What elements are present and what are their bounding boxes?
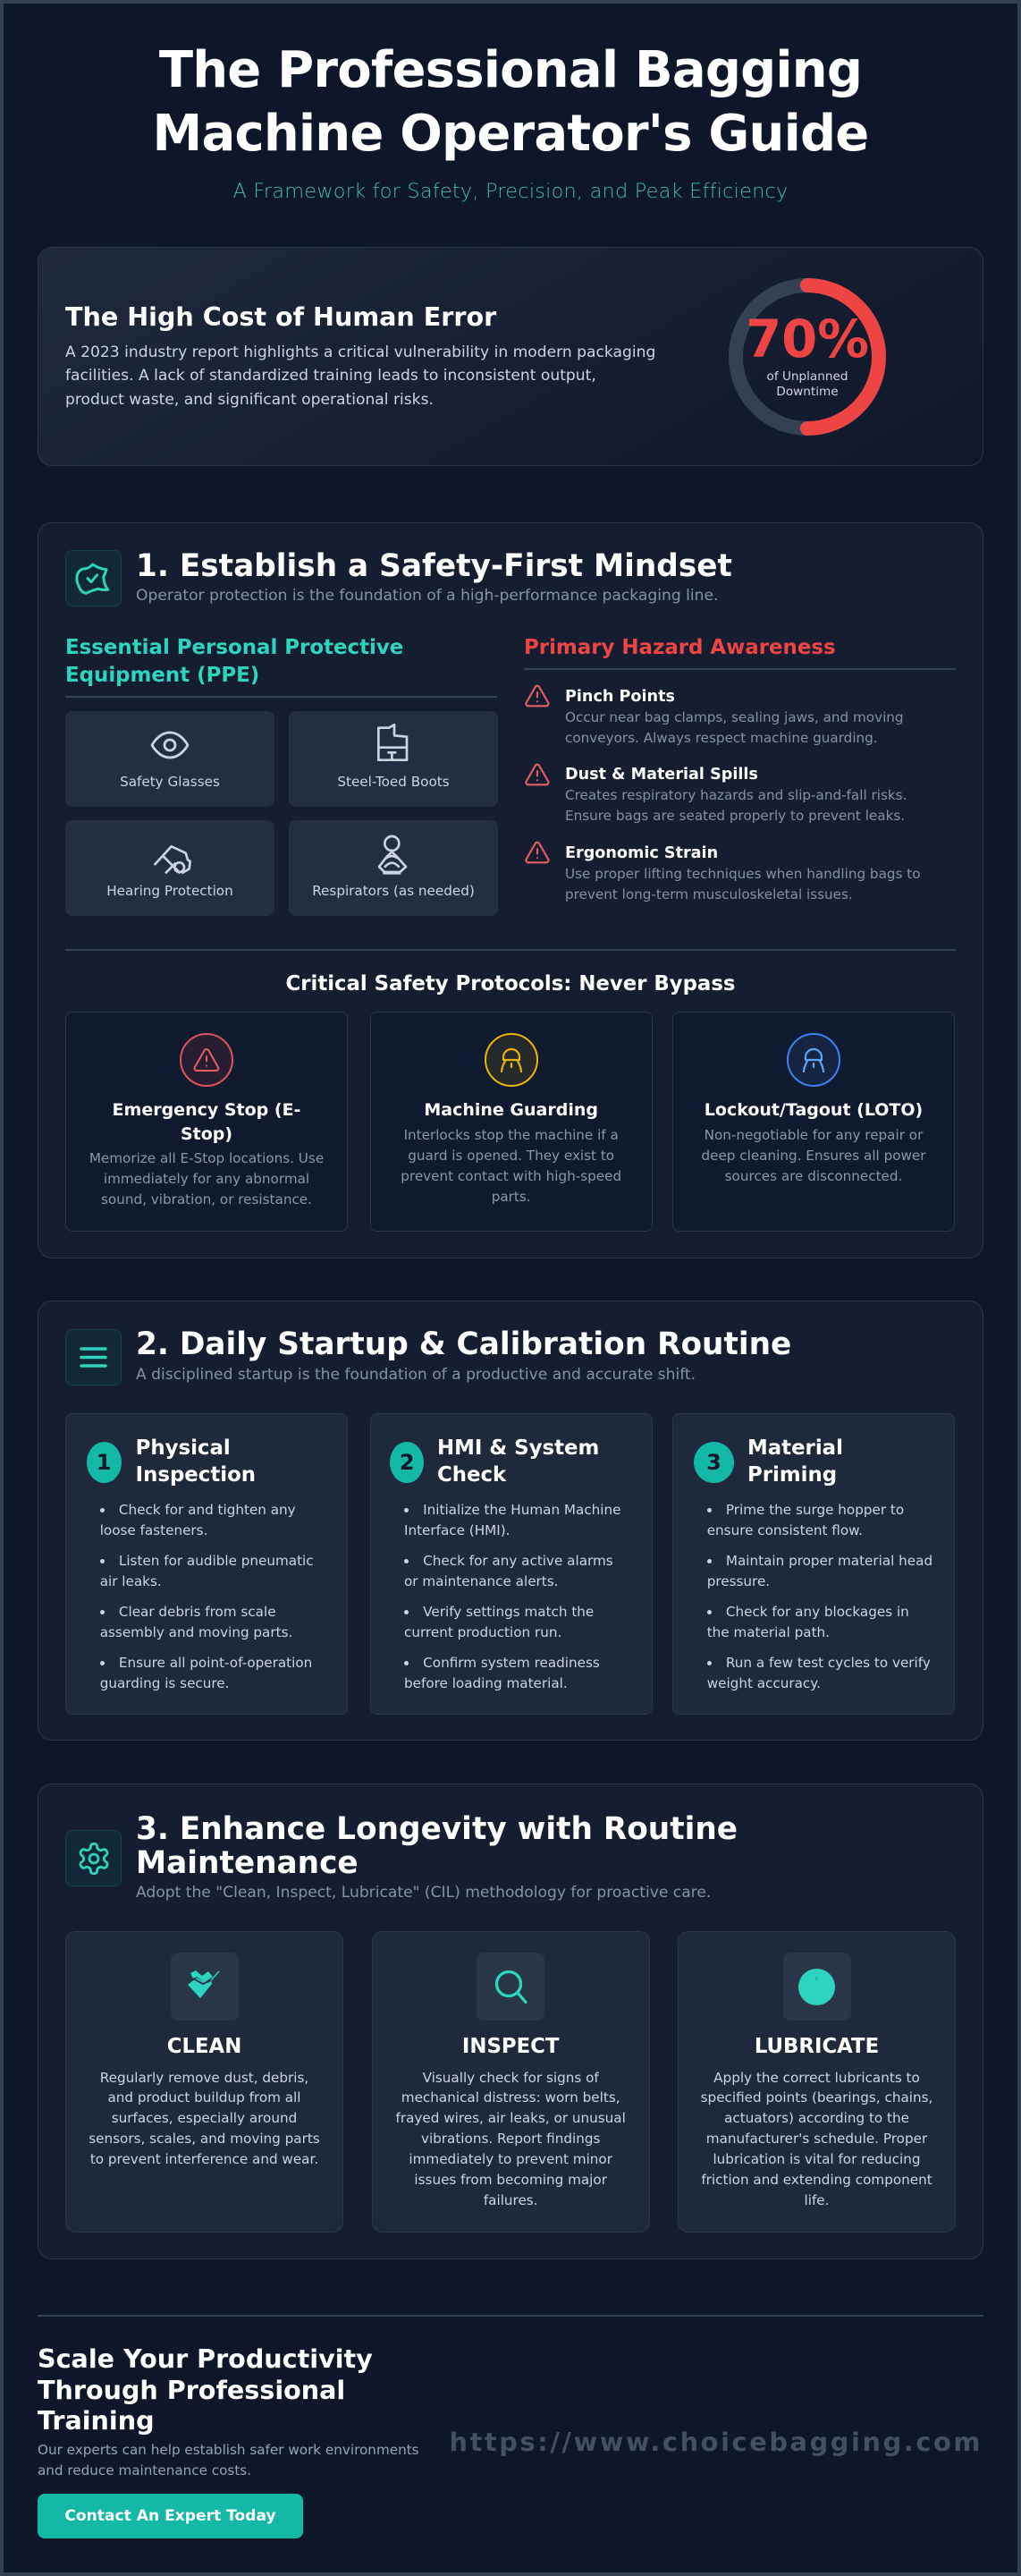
protocol card: machine guarding bbox=[370, 1012, 653, 1232]
hero text: A 2023 industry report highlights a critical vulnerability in modern packaging bbox=[65, 343, 655, 361]
footer heading: Training bbox=[38, 2405, 155, 2436]
PPE card: safety glasses bbox=[65, 711, 274, 807]
stat value: 70% bbox=[746, 309, 869, 369]
step card: HMI and system check: Verify settings match the bbox=[423, 1604, 594, 1620]
icon: lock in blue circle bbox=[787, 1033, 840, 1087]
protocols heading: Critical Safety Protocols: Never Bypass bbox=[286, 972, 735, 996]
PPE card: steel-toed boots: Steel-Toed Boots bbox=[337, 774, 450, 790]
PPE card: respirators bbox=[289, 820, 498, 916]
step card: material priming: Prime the surge hopper to bbox=[726, 1501, 904, 1517]
step card: physical inspection: Listen for audible pneumatic bbox=[119, 1553, 314, 1569]
section 2 heading: 2. Daily Startup & Calibration Routine bbox=[136, 1326, 791, 1362]
section 2 subheading: A disciplined startup is the foundation of a productive and accurate shift. bbox=[136, 1366, 696, 1384]
step card: physical inspection: loose fasteners. bbox=[100, 1522, 207, 1538]
step card: HMI and system check: current production run. bbox=[404, 1624, 561, 1640]
protocol card: emergency stop: immediately for any abnormal bbox=[104, 1170, 309, 1186]
icon: gear bbox=[65, 1830, 122, 1886]
hazard: ergonomic strain: prevent long-term musculoskeletal issues. bbox=[565, 886, 853, 902]
step card: physical inspection: Check for and tighten any bbox=[119, 1501, 296, 1517]
icon: respirator bbox=[377, 835, 408, 875]
PPE card: hearing protection: Hearing Protection bbox=[106, 883, 233, 899]
step number 2 bbox=[390, 1442, 424, 1483]
protocol card: lockout tagout: Lockout/Tagout (LOTO) bbox=[705, 1100, 923, 1120]
CIL card: lubricate: LUBRICATE bbox=[755, 2035, 879, 2058]
PPE heading: Equipment (PPE) bbox=[65, 664, 259, 687]
title: Machine Operator's Guide bbox=[153, 105, 868, 163]
step card: HMI and system check: HMI & System bbox=[437, 1436, 599, 1460]
protocol card: emergency stop: Emergency Stop (E- bbox=[113, 1100, 300, 1120]
CIL card: inspect: Visually check for signs of bbox=[423, 2070, 599, 2086]
protocol card: emergency stop bbox=[65, 1012, 348, 1232]
step card: HMI and system check: Confirm system readiness bbox=[423, 1655, 600, 1671]
PPE card: steel-toed boots bbox=[289, 711, 498, 807]
hazard: dust and material spills: Ensure bags are seated properly to prevent leaks. bbox=[565, 808, 905, 824]
step card: HMI and system check: Check bbox=[437, 1463, 506, 1487]
icon: warning in red circle bbox=[180, 1033, 233, 1087]
step card: material priming: Check for any blockages in bbox=[726, 1604, 909, 1620]
step number 1: 1 bbox=[97, 1450, 111, 1475]
hazard: ergonomic strain bbox=[525, 841, 921, 902]
footer text: and reduce maintenance costs. bbox=[38, 2462, 251, 2478]
icon: eye bbox=[150, 732, 190, 758]
step card: HMI and system check bbox=[370, 1413, 653, 1715]
hazard: pinch points: conveyors. Always respect machine guarding. bbox=[565, 730, 878, 746]
step card: HMI and system check: Check for any active alarms bbox=[423, 1553, 613, 1569]
CIL card: lubricate: specified points (bearings, chains, bbox=[701, 2089, 932, 2106]
title: The Professional Bagging bbox=[159, 41, 862, 98]
icon: hearing protection bbox=[154, 845, 191, 875]
hazard: ergonomic strain: Use proper lifting techniques when handling bags to bbox=[565, 866, 921, 882]
hazard: dust and material spills: Creates respiratory hazards and slip-and-fall risks. bbox=[565, 787, 907, 803]
step card: material priming: ensure consistent flow. bbox=[707, 1522, 863, 1538]
CIL card: inspect: issues from becoming major bbox=[414, 2172, 607, 2188]
step card: physical inspection: Clear debris from scale bbox=[119, 1604, 276, 1620]
step number 2: 2 bbox=[400, 1450, 415, 1475]
CIL card: clean: CLEAN bbox=[167, 2035, 241, 2058]
step card: material priming: Run a few test cycles to verify bbox=[726, 1655, 931, 1671]
PPE card: respirators: Respirators (as needed) bbox=[312, 883, 475, 899]
footer heading bbox=[38, 2343, 373, 2436]
step card: material priming bbox=[672, 1413, 955, 1715]
panel: section 3 maintenance bbox=[38, 1784, 983, 2259]
hazard heading: Primary Hazard Awareness bbox=[524, 636, 836, 659]
step number 1 bbox=[87, 1442, 122, 1483]
hazard: dust and material spills: Dust & Material Spills bbox=[565, 766, 758, 784]
CIL card: clean: Regularly remove dust, debris, bbox=[100, 2070, 308, 2086]
CIL card: clean: to prevent interference and wear. bbox=[90, 2151, 318, 2167]
hazard: pinch points bbox=[525, 685, 904, 746]
step card: physical inspection: air leaks. bbox=[100, 1573, 162, 1589]
CIL card: lubricate: lubrication is vital for reducing bbox=[713, 2151, 921, 2167]
CIL card: inspect: INSPECT bbox=[462, 2035, 559, 2058]
call-to-action button bbox=[38, 2494, 303, 2538]
protocol card: emergency stop: Stop) bbox=[181, 1124, 232, 1144]
CIL card: lubricate bbox=[678, 1931, 956, 2233]
step card: HMI and system check: before loading material. bbox=[404, 1675, 568, 1691]
CIL card: inspect: failures. bbox=[484, 2192, 538, 2208]
step card: material priming: the material path. bbox=[707, 1624, 830, 1640]
protocol card: lockout tagout: sources are disconnected. bbox=[725, 1168, 902, 1184]
section 3 heading bbox=[136, 1811, 738, 1881]
protocol card: machine guarding: Interlocks stop the machine if a bbox=[404, 1127, 619, 1143]
icon: clean bbox=[170, 1953, 238, 2021]
CIL card: inspect: immediately to prevent minor bbox=[409, 2151, 612, 2167]
CIL card: lubricate: actuators) according to the bbox=[724, 2110, 909, 2126]
title bbox=[153, 41, 868, 163]
step card: material priming: pressure. bbox=[707, 1573, 770, 1589]
protocol card: lockout tagout bbox=[672, 1012, 955, 1232]
hero text: facilities. A lack of standardized training leads to inconsistent output, bbox=[65, 367, 596, 385]
footer text: Our experts can help establish safer work environments bbox=[38, 2442, 419, 2458]
stat caption: Downtime bbox=[776, 385, 839, 399]
PPE heading bbox=[65, 636, 403, 687]
icon: magnifier bbox=[477, 1953, 544, 2021]
step card: HMI and system check: or maintenance alerts. bbox=[404, 1573, 558, 1589]
protocol card: emergency stop: Memorize all E-Stop locations. Use bbox=[89, 1150, 324, 1166]
CIL card: clean: and product buildup from all bbox=[107, 2089, 300, 2106]
section 1 subheading: Operator protection is the foundation of a high-performance packaging line. bbox=[136, 587, 718, 605]
hazard: pinch points: Pinch Points bbox=[565, 687, 675, 705]
step card: physical inspection bbox=[65, 1413, 348, 1715]
call-to-action button: Contact An Expert Today bbox=[64, 2507, 276, 2525]
CIL card: lubricate: Apply the correct lubricants to bbox=[713, 2070, 920, 2086]
hero heading: The High Cost of Human Error bbox=[65, 301, 496, 332]
icon: guard in yellow circle bbox=[485, 1033, 538, 1087]
CIL card: inspect: frayed wires, air leaks, or unusual bbox=[396, 2110, 626, 2126]
donut chart: 70 percent bbox=[729, 278, 886, 436]
step card: physical inspection: Inspection bbox=[136, 1463, 256, 1487]
step card: HMI and system check: Interface (HMI). bbox=[404, 1522, 510, 1538]
hazard: pinch points: Occur near bag clamps, sealing jaws, and moving bbox=[565, 708, 904, 724]
CIL card: inspect: vibrations. Report findings bbox=[421, 2131, 600, 2147]
CIL card: lubricate: friction and extending component bbox=[701, 2172, 932, 2188]
subtitle: A Framework for Safety, Precision, and Peak Efficiency bbox=[232, 180, 789, 203]
icon: boot bbox=[377, 723, 408, 761]
CIL card: inspect bbox=[372, 1931, 650, 2233]
section 3 subheading: Adopt the "Clean, Inspect, Lubricate" (CIL) methodology for proactive care. bbox=[136, 1884, 711, 1902]
step card: HMI and system check: Initialize the Human Machine bbox=[423, 1501, 620, 1517]
CIL card: lubricate: life. bbox=[805, 2192, 829, 2208]
PPE card: hearing protection bbox=[65, 820, 274, 916]
step number 3: 3 bbox=[706, 1450, 721, 1475]
step card: material priming: Priming bbox=[747, 1463, 837, 1487]
protocol card: machine guarding: prevent contact with high-speed bbox=[401, 1168, 621, 1184]
icon: warning triangle bbox=[525, 764, 550, 785]
section 3 heading: 3. Enhance Longevity with Routine bbox=[136, 1811, 738, 1847]
CIL card: clean bbox=[65, 1931, 343, 2233]
footer heading: Scale Your Productivity bbox=[38, 2343, 373, 2374]
PPE card: safety glasses: Safety Glasses bbox=[120, 774, 220, 790]
step card: physical inspection: Ensure all point-of-operation bbox=[119, 1655, 312, 1671]
PPE heading: Essential Personal Protective bbox=[65, 636, 403, 659]
hazard: ergonomic strain: Ergonomic Strain bbox=[565, 844, 718, 862]
protocol card: lockout tagout: deep cleaning. Ensures all power bbox=[701, 1147, 926, 1163]
stat caption bbox=[767, 369, 848, 399]
panel: section 2 startup bbox=[38, 1301, 983, 1741]
CIL card: clean: sensors, scales, and moving parts bbox=[89, 2131, 320, 2147]
protocol card: machine guarding: parts. bbox=[492, 1188, 531, 1204]
CIL card: clean: surfaces, especially around bbox=[112, 2110, 297, 2126]
step card: material priming: weight accuracy. bbox=[707, 1675, 821, 1691]
step card: physical inspection: guarding is secure. bbox=[100, 1675, 229, 1691]
panel: high cost of human error bbox=[38, 247, 983, 466]
protocol card: machine guarding: guard is opened. They exist to bbox=[408, 1147, 614, 1163]
panel: section 1 safety bbox=[38, 522, 983, 1258]
website URL: https://www.choicebagging.com bbox=[449, 2427, 983, 2457]
step card: material priming: Maintain proper material head bbox=[726, 1553, 932, 1569]
footer text bbox=[38, 2442, 419, 2478]
hero text: product waste, and significant operational risks. bbox=[65, 391, 434, 409]
section 3 heading: Maintenance bbox=[136, 1845, 359, 1881]
protocol card: emergency stop: sound, vibration, or resistance. bbox=[101, 1191, 312, 1208]
step card: material priming: Material bbox=[747, 1436, 843, 1460]
protocol card: lockout tagout: Non-negotiable for any repair or bbox=[705, 1127, 923, 1143]
step card: physical inspection: Physical bbox=[136, 1436, 231, 1460]
icon: warning triangle bbox=[525, 841, 550, 864]
CIL card: inspect: mechanical distress: worn belts, bbox=[401, 2089, 620, 2106]
footer heading: Through Professional bbox=[38, 2375, 345, 2405]
hazard: dust and material spills bbox=[525, 764, 907, 824]
step card: physical inspection: assembly and moving parts. bbox=[100, 1624, 292, 1640]
CIL card: lubricate: manufacturer's schedule. Proper bbox=[706, 2131, 927, 2147]
stat caption: of Unplanned bbox=[767, 369, 848, 384]
icon: menu lines bbox=[65, 1329, 122, 1385]
section 1 heading: 1. Establish a Safety-First Mindset bbox=[136, 548, 732, 584]
step number 3 bbox=[694, 1442, 734, 1483]
protocol card: machine guarding: Machine Guarding bbox=[424, 1100, 598, 1120]
icon: shield check bbox=[65, 550, 122, 606]
icon: warning triangle bbox=[525, 685, 550, 707]
icon: lubricant drop bbox=[783, 1953, 851, 2021]
hero text bbox=[65, 343, 655, 409]
